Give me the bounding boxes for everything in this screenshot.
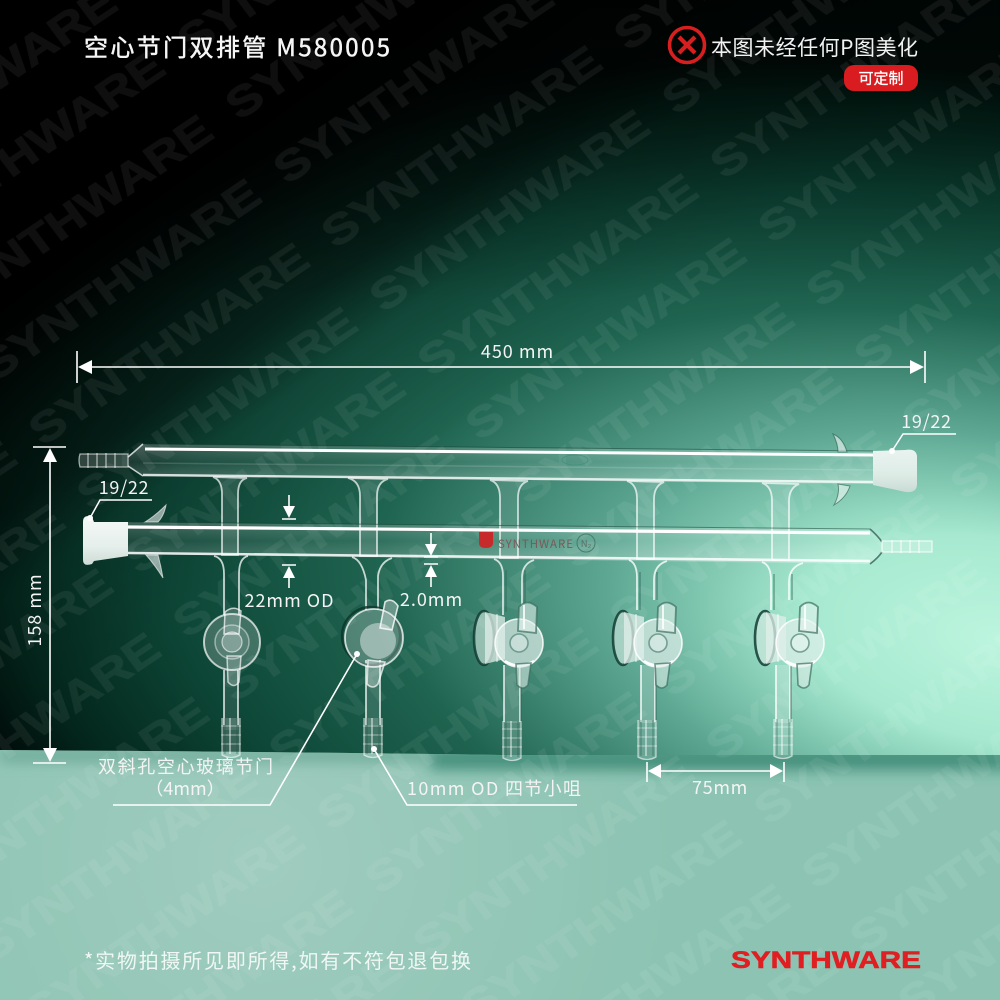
callout: stopcock: 双斜孔空心玻璃节门: [98, 753, 273, 779]
callout: hose barb: 10mm OD 四节小咀: [407, 775, 581, 801]
brand mark on tube: N₂: [581, 536, 592, 550]
stem 5 with stopcock: [755, 562, 824, 758]
title: 空心节门双排管 M580005: [84, 28, 390, 63]
drop tubes connecting upper and lower manifold: [213, 477, 799, 560]
callout: right joint 19/22: 19/22: [901, 408, 952, 434]
dimension: 22mm OD: 22mm OD: [244, 587, 335, 613]
brand mark on tube: [479, 532, 595, 552]
logo: SYNTHWARE: SYNTHWARE: [731, 947, 921, 974]
dimension: 22mm OD: [244, 495, 335, 613]
manifold: glass double-bank: [79, 434, 932, 760]
brand mark on tube: SYNTHWARE: [498, 536, 573, 552]
dimension: 75mm: 75mm: [692, 774, 748, 800]
dimension: 158 mm: [21, 447, 66, 763]
callout: stopcock: （4mm）: [145, 775, 225, 801]
stem 1 with stopcock: [204, 556, 260, 758]
dimension: 450 mm: [77, 338, 925, 383]
floor surface: [0, 748, 1000, 1000]
badge: customizable: 可定制: [858, 68, 904, 88]
lower manifold tube: [128, 505, 932, 578]
dimension: 158 mm: 158 mm: [21, 573, 47, 647]
stem 3 with stopcock: [474, 559, 543, 760]
upper manifold tube: [79, 434, 873, 505]
footer note: *实物拍摄所见即所得,如有不符包退包换: [84, 945, 471, 974]
callout: left joint 19/22: [87, 474, 152, 521]
callout: hose barb: [371, 746, 581, 805]
stem 4 with stopcock: [613, 560, 682, 760]
badge: customizable: [844, 65, 918, 91]
dimension: 2.0mm wall: 2.0mm: [400, 586, 463, 612]
notice: not retouched: 本图未经任何P图美化: [711, 32, 918, 62]
stem 2 with stopcock: [342, 557, 403, 758]
callout: right joint 19/22: [889, 408, 956, 454]
callout: left joint 19/22: 19/22: [99, 474, 149, 500]
dimension: 75mm: [647, 762, 784, 800]
callout: stopcock: [98, 651, 360, 805]
dimension: 2.0mm wall: [400, 533, 463, 612]
dimension: 450 mm: 450 mm: [481, 338, 554, 364]
icon: red cross badge: [670, 28, 704, 62]
lower ground joint 19/22: [83, 516, 128, 565]
upper ground joint 19/22: [873, 450, 917, 492]
